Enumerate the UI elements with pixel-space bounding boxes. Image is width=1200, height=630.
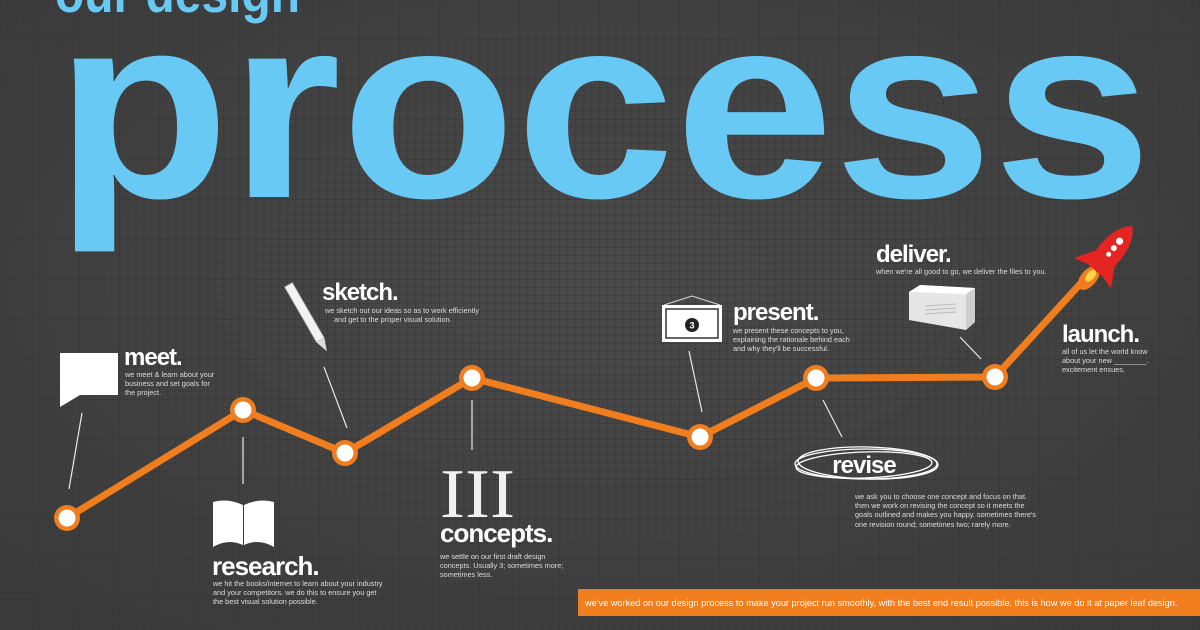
step: concepts: concepts. <box>440 518 552 548</box>
icon: book <box>213 501 274 547</box>
step: concepts: concepts. Usually 3; sometimes more; <box>440 561 563 570</box>
step: present: explaining the rationale behind each <box>733 335 850 344</box>
footer banner: we've worked on our design process to make your project run smoothly, with the best end result possible. this is how we do it at paper leaf design. <box>584 598 1177 608</box>
step: present <box>662 296 850 353</box>
step: research: and your competitors. we do this to ensure you get <box>213 588 376 597</box>
step: revise: goals outlined and makes you happy. sometimes there's <box>855 510 1036 519</box>
step: deliver: when we're all good to go, we deliver the files to you. <box>875 267 1047 276</box>
step: revise: revise <box>832 452 896 479</box>
footer banner <box>578 589 1200 616</box>
step: sketch <box>285 279 479 354</box>
step: meet: the project. <box>125 388 161 397</box>
step: research: we hit the books/internet to learn about your industry <box>212 579 383 588</box>
step: launch <box>1061 210 1151 374</box>
step: meet: meet. <box>124 344 182 371</box>
step: concepts: we settle on our first draft design <box>439 552 545 561</box>
step: concepts: sometimes less. <box>440 570 492 579</box>
step: sketch: we sketch out our ideas so as to work efficiently <box>324 306 479 315</box>
step: launch: all of us let the world know <box>1062 347 1148 356</box>
step: present: we present these concepts to you, <box>732 326 844 335</box>
step: launch: about your new ________. <box>1062 356 1148 365</box>
step: meet: we meet & learn about your <box>124 370 215 379</box>
step: meet <box>60 344 215 407</box>
icon: pencil <box>285 282 331 354</box>
icon: framed 3 <box>662 296 722 342</box>
step: meet: business and set goals for <box>125 379 210 388</box>
icon: framed 3: 3 <box>689 320 695 330</box>
icon: III: III <box>440 456 515 533</box>
step: sketch: sketch. <box>322 279 398 306</box>
step: research: research. <box>212 551 319 581</box>
step: launch: excitement ensues. <box>1062 365 1125 374</box>
step: revise: then we work on revising the concept so it meets the <box>855 501 1025 510</box>
step: revise: we ask you to choose one concept and focus on that. <box>854 492 1027 501</box>
icon: scribbled oval <box>795 445 938 481</box>
icon: box <box>909 285 975 330</box>
step: deliver: deliver. <box>876 241 951 268</box>
process line chart <box>54 282 1082 531</box>
step: sketch: and get to the proper visual solution. <box>334 315 452 324</box>
step: present: and why they'll be successful. <box>733 344 829 353</box>
step: revise <box>795 445 1036 529</box>
step: present: present. <box>733 299 819 326</box>
step: launch: launch. <box>1062 321 1139 348</box>
step: revise: one revision round; sometimes two; rarely more. <box>855 520 1011 529</box>
step: deliver <box>875 241 1047 330</box>
step: research <box>212 501 383 606</box>
icon: rocket <box>1061 210 1151 304</box>
step: concepts <box>439 456 563 579</box>
step: research: the best visual solution possible. <box>213 597 318 606</box>
icon: speech bubble <box>60 353 118 407</box>
